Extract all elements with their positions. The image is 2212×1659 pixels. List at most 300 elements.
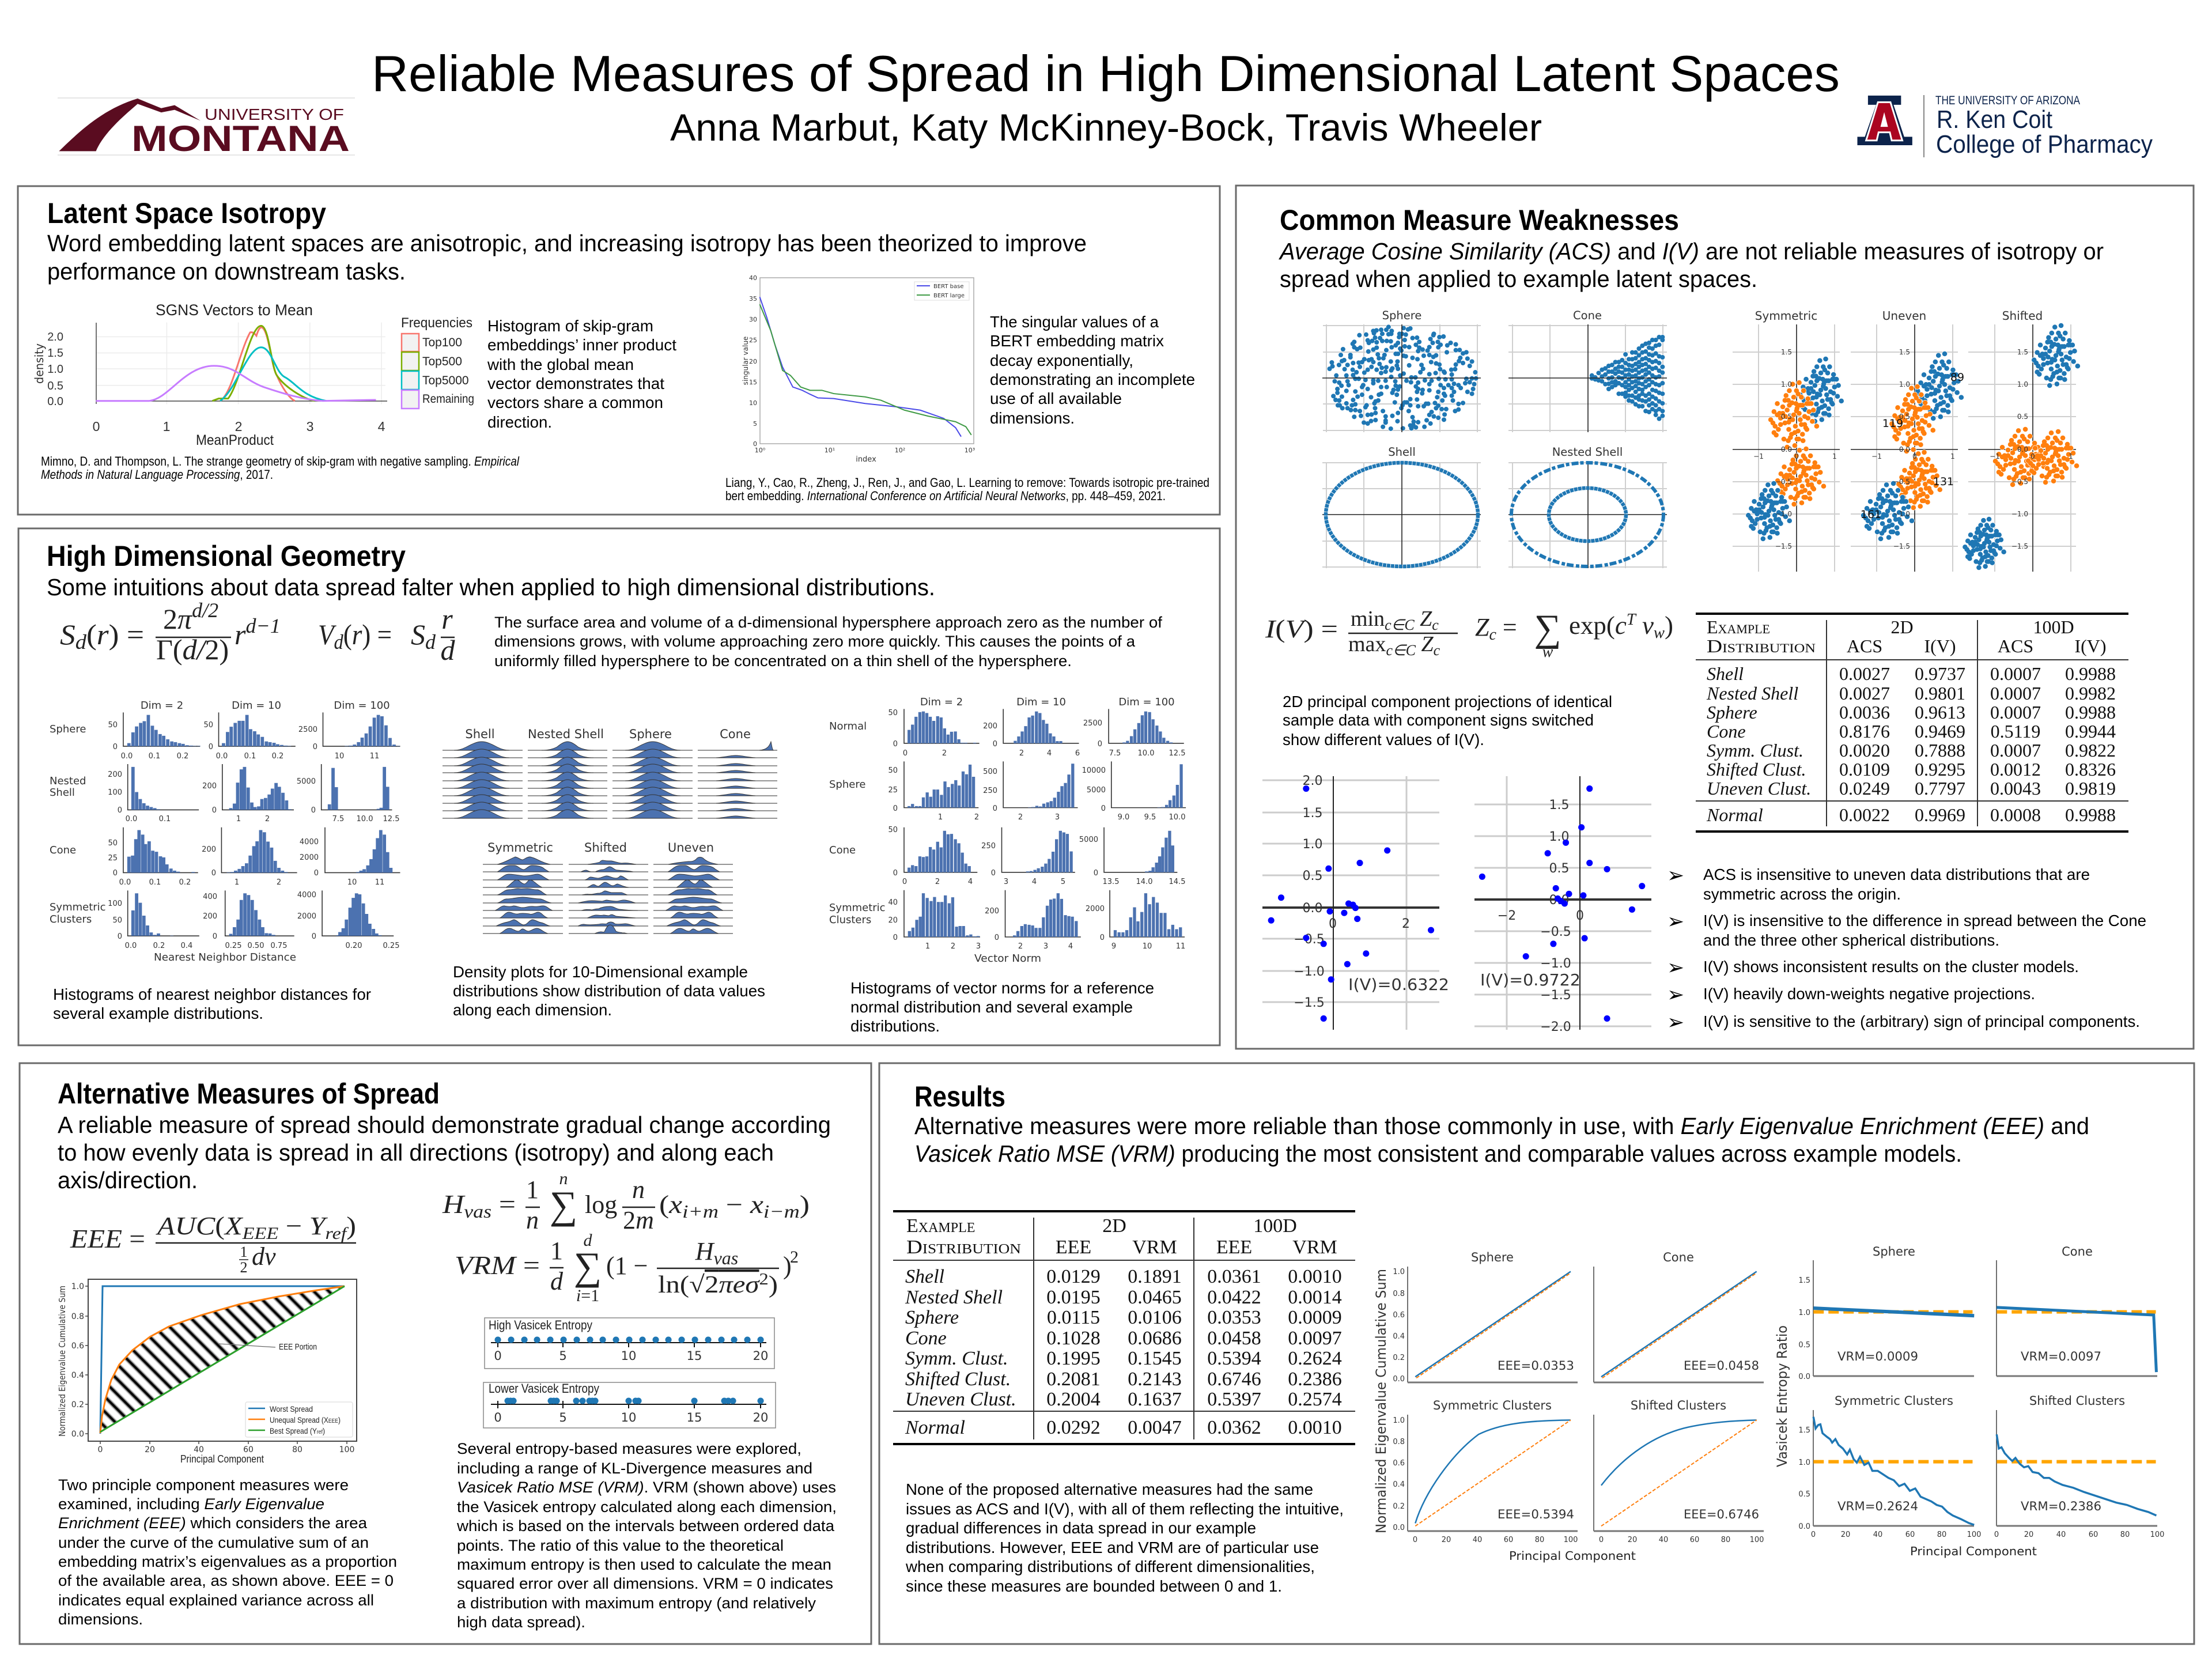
scatter: nested shell	[1508, 445, 1667, 568]
formula: VRM: 2	[790, 1248, 799, 1267]
bullet list: measure weaknesses: ➢	[1667, 1011, 1684, 1034]
table: EEE and VRM: 0.2386	[1288, 1369, 1342, 1390]
caption: nearest neighbor histograms: Histograms of nearest neighbor distances for	[53, 985, 371, 1003]
chart: BERT singular values: singular value	[742, 337, 750, 385]
column and row headings: Dim = 10	[232, 700, 281, 712]
chart: EEE portion illustration: 0.8	[71, 1312, 84, 1321]
plot: symmetric clusters VRM: 40	[1873, 1530, 1882, 1539]
formula: I(V): c	[1489, 626, 1496, 644]
text: results discussion: gradual differences in data spread in our example	[906, 1519, 1256, 1537]
histogram: nested shell dim 2: 0.1	[159, 815, 171, 823]
diagram: high Vasicek entropy: 20	[753, 1349, 768, 1363]
histogram: sphere dim 2: 50	[888, 766, 898, 775]
caption: density plots	[453, 963, 765, 1019]
bullet list: measure weaknesses	[1667, 864, 2146, 1034]
text: surface area and volume explanation: uniformly filled hypersphere to be concentrated on a thin shell of the hypersphere.	[494, 652, 1072, 670]
table: ACS and I(V): 0.0022	[1839, 804, 1890, 825]
logo: University of Arizona College of Pharmacy: R. Ken Coit	[1937, 105, 2052, 134]
histogram: normal dim 100: 10.0	[1138, 749, 1154, 758]
formula: Vasicek entropy: (x	[659, 1191, 680, 1219]
histogram: symmetric clusters dim 10: 400	[203, 893, 217, 901]
plot: cone EEE: EEE=0.0458	[1684, 1359, 1759, 1373]
histogram: cone dim 100: 11	[375, 878, 384, 887]
formula: EEE: dv	[252, 1242, 276, 1271]
chart: BERT singular values: 5	[753, 420, 757, 428]
histogram: symmetric clusters dim 2: 1	[925, 942, 930, 951]
table: EEE and VRM: 0.6746	[1207, 1369, 1261, 1390]
scatter: projection with I(V)=0.9722: 0.0	[1549, 893, 1570, 908]
formula: EEE	[70, 1212, 356, 1276]
histogram: cone dim 2: 50	[888, 826, 898, 834]
plot: symmetric clusters VRM: VRM=0.2624	[1837, 1499, 1918, 1513]
plot: symmetric clusters EEE: 1.0	[1393, 1416, 1405, 1425]
table: ACS and I(V)	[1696, 614, 2128, 832]
table: EEE and VRM: 100D	[1253, 1215, 1297, 1237]
table: ACS and I(V): 0.0249	[1839, 778, 1890, 799]
scatter: uneven clusters: 1	[1950, 452, 1955, 460]
plot: symmetric clusters VRM: 0.5	[1798, 1490, 1810, 1499]
text: VRM description: Vasicek Ratio MSE (VRM) . VRM (shown above) uses	[457, 1479, 836, 1496]
formula: hypersphere surface and volume: (	[86, 618, 97, 651]
text: VRM description: which is based on the intervals between ordered data	[456, 1517, 835, 1535]
histogram: symmetric clusters dim 100: 10	[1143, 942, 1152, 951]
chart: SGNS density curves	[32, 301, 387, 448]
legend: frequencies: Top5000	[422, 374, 469, 387]
plot: symmetric clusters EEE	[1393, 1399, 1578, 1544]
chart: EEE portion illustration: 0.4	[71, 1371, 84, 1380]
formula: hypersphere surface and volume	[60, 599, 455, 666]
histogram: symmetric clusters dim 2: 50	[112, 916, 122, 925]
histogram: symmetric clusters dim 100: 4000	[297, 891, 316, 900]
scatter: projection with I(V)=0.6322: 2.0	[1302, 774, 1323, 788]
table: EEE and VRM: Shifted Clust.	[905, 1369, 1011, 1390]
table: ACS and I(V): 0.9737	[1915, 663, 1965, 684]
density ridge plots: spherical distributions	[443, 727, 777, 818]
scatter: uneven clusters	[1851, 309, 1964, 572]
caption: nearest neighbor histograms: several example distributions.	[53, 1004, 263, 1022]
column and row headings: Clusters	[829, 914, 871, 926]
scatter: symmetric clusters: 1.0	[1781, 380, 1792, 388]
formula: I(V): I(V) =	[1265, 615, 1338, 643]
scatter: uneven clusters: 161	[1861, 508, 1881, 521]
formula: VRM: i=1	[576, 1286, 599, 1305]
text: EEE description: indicates equal explained variance across all	[58, 1592, 374, 1609]
heading: Latent Space Isotropy	[47, 197, 326, 229]
histogram: symmetric clusters dim 2: 0	[893, 934, 898, 942]
text: VRM description	[456, 1440, 837, 1631]
histogram: symmetric clusters dim 2: 0.0	[125, 942, 137, 950]
formula: EEE: −	[278, 1212, 309, 1240]
scatter: symmetric clusters: 0	[1794, 452, 1799, 460]
formula: hypersphere surface and volume: d	[334, 630, 344, 653]
table: EEE and VRM: 0.1891	[1128, 1266, 1182, 1287]
histogram: nested shell dim 100: 7.5	[332, 815, 344, 823]
caption: skip-gram histogram: with the global mean	[487, 356, 634, 373]
legend: frequencies: Remaining	[422, 392, 474, 406]
scatter: symmetric clusters: 1.5	[1781, 348, 1792, 356]
histogram: nested shell dim 100: 0	[311, 806, 316, 815]
chart: EEE portion illustration: 0.6	[71, 1341, 84, 1351]
column and row headings: Dim = 2	[920, 696, 963, 708]
histogram: nested shell dim 2: 0.0	[126, 815, 137, 823]
chart: BERT singular values: 10³	[965, 447, 975, 454]
histogram: sphere dim 10	[203, 712, 296, 761]
scatter: shifted clusters: −1.5	[2011, 542, 2028, 550]
table: ACS and I(V): 0.9969	[1915, 804, 1965, 825]
scatter: projection with I(V)=0.9722	[1474, 776, 1651, 1034]
scatter: symmetric clusters: −1.5	[1775, 542, 1792, 550]
histogram: cone dim 2: 0.2	[179, 878, 191, 887]
scatter: nested shell: Nested Shell	[1552, 445, 1623, 459]
citation: Mimno and Thompson: Methods in Natural Language Processing, 2017.	[41, 467, 273, 482]
histogram: cone dim 10: 1	[235, 878, 239, 887]
logo: University of Arizona College of Pharmacy: THE UNIVERSITY OF ARIZONA	[1935, 94, 2080, 107]
plot: sphere EEE: 1.0	[1393, 1268, 1405, 1276]
table: EEE and VRM: 0.0195	[1046, 1287, 1101, 1308]
text: EEE description: Two principle component measures were	[58, 1476, 349, 1494]
table: ACS and I(V): 0.9801	[1915, 683, 1965, 704]
table: EEE and VRM: Shell	[905, 1266, 944, 1287]
histogram: cone dim 2: 0	[893, 869, 898, 878]
text: EEE description: dimensions.	[58, 1611, 143, 1628]
column and row headings: Dim = 10	[1016, 696, 1066, 708]
table: EEE and VRM: VRM	[1292, 1237, 1337, 1258]
text: EEE description: examined, including Early Eigenvalue	[58, 1495, 324, 1513]
histogram: cone dim 10: 3	[1004, 878, 1008, 886]
histogram: sphere dim 2: 0.1	[149, 752, 160, 761]
scatter: shifted clusters: 0.0	[2017, 445, 2028, 454]
column and row headings	[829, 696, 1175, 965]
formula: I(V): =	[1496, 613, 1517, 641]
column and row headings: Nearest Neighbor Distance	[154, 951, 296, 963]
diagram: high Vasicek entropy: 5	[559, 1349, 567, 1363]
table: EEE and VRM: 0.0115	[1047, 1307, 1100, 1328]
text: EEE description: embedding matrix’s eigenvalues as a proportion	[58, 1553, 397, 1570]
density ridge plots: spherical distributions: Nested Shell	[528, 727, 604, 741]
table: ACS and I(V): 0.0007	[1990, 683, 2041, 704]
density ridge plots: spherical distributions: Cone	[720, 727, 751, 741]
chart group: Vasicek entropy ratios: Principal Component	[1910, 1544, 2037, 1558]
histogram: cone dim 10	[202, 827, 297, 887]
scatter: projection with I(V)=0.6322: 0.0	[1302, 901, 1323, 916]
plot: symmetric clusters EEE: 0.2	[1393, 1502, 1405, 1511]
plot: shifted clusters EEE	[1594, 1399, 1764, 1544]
diagram: high Vasicek entropy: 0	[494, 1349, 502, 1363]
bullet list: measure weaknesses: I(V) is sensitive to the (arbitrary) sign of principal components.	[1703, 1012, 2140, 1030]
histogram: cone dim 2: 0	[902, 878, 907, 886]
histogram: normal dim 2: 0	[893, 740, 898, 749]
column and row headings: Sphere	[50, 723, 86, 735]
diagram: lower Vasicek entropy: 0	[494, 1411, 502, 1424]
table: ACS and I(V): 0.9469	[1915, 721, 1965, 742]
scatter: uneven clusters: 89	[1950, 371, 1964, 384]
plot: shifted clusters EEE: 0	[1599, 1536, 1604, 1544]
scatter: projection with I(V)=0.9722: −0.5	[1540, 925, 1571, 939]
plot: cone VRM	[1997, 1245, 2157, 1376]
histogram: sphere dim 2: 0	[893, 804, 898, 813]
table: EEE and VRM: Normal	[905, 1417, 965, 1438]
chart: BERT singular values: 10²	[895, 447, 905, 454]
intro text: performance on downstream tasks.	[47, 258, 406, 285]
formula: Vasicek entropy: 1	[526, 1176, 539, 1204]
table: ACS and I(V): 0.0020	[1839, 740, 1890, 761]
histogram: nested shell dim 2: 100	[108, 788, 122, 797]
histogram: nested shell dim 100: 12.5	[383, 815, 399, 823]
formula: Vasicek entropy: ∑	[550, 1183, 577, 1227]
chart: SGNS density curves: SGNS Vectors to Mean	[156, 301, 313, 319]
scatter: uneven clusters: −1	[1871, 452, 1882, 460]
histogram: sphere dim 100: 2500	[298, 725, 317, 734]
text: results discussion: since these measures are bounded between 0 and 1.	[906, 1577, 1282, 1595]
histogram: symmetric clusters dim 10	[985, 890, 1081, 951]
intro text: Some intuitions about data spread falter when applied to high dimensional distributions.	[47, 574, 935, 600]
plot: symmetric clusters VRM: 1.0	[1798, 1458, 1810, 1467]
plot: sphere VRM: 1.5	[1798, 1276, 1810, 1285]
panel: latent space isotropy	[18, 186, 1220, 515]
formula: VRM: VRM =	[455, 1250, 540, 1280]
histogram: symmetric clusters dim 2: 20	[888, 916, 898, 925]
table: ACS and I(V): 0.0007	[1990, 740, 2041, 761]
table: ACS and I(V): 0.0027	[1839, 663, 1890, 684]
scatter: shifted clusters: 1.5	[2017, 348, 2028, 356]
histogram: sphere dim 10	[983, 761, 1077, 822]
formula: I(V): w	[1542, 643, 1553, 661]
histogram: sphere dim 100: 0	[313, 743, 317, 751]
formula: I(V): v	[1636, 611, 1654, 640]
legend: frequencies: Frequencies	[401, 315, 472, 331]
chart: SGNS density curves: 2.0	[47, 331, 63, 343]
logo: University of Arizona College of Pharmacy: College of Pharmacy	[1936, 130, 2153, 158]
caption: skip-gram histogram: embeddings’ inner product	[487, 336, 676, 354]
table: ACS and I(V): 0.0027	[1839, 683, 1890, 704]
formula: Vasicek entropy: x	[750, 1191, 762, 1219]
formula: Vasicek entropy: H	[443, 1189, 462, 1219]
histogram: nested shell dim 2: 200	[108, 770, 122, 779]
table: EEE and VRM: 0.0458	[1207, 1328, 1261, 1349]
plot: cone VRM: VRM=0.0097	[2021, 1350, 2101, 1363]
caption: skip-gram histogram: vector demonstrates that	[487, 375, 664, 392]
intro text: A reliable measure of spread should demonstrate gradual change according	[58, 1112, 831, 1138]
caption: BERT singular values: dimensions.	[990, 409, 1075, 427]
histogram: cone dim 2: 0	[113, 869, 118, 878]
table: EEE and VRM: 0.0014	[1288, 1287, 1342, 1308]
table: ACS and I(V): 0.9982	[2065, 683, 2116, 704]
intro text: Word embedding latent spaces are anisotropic, and increasing isotropy has been theorized to improve	[47, 230, 1087, 256]
histogram: normal dim 10	[983, 709, 1080, 758]
logo: University of Arizona College of Pharmacy	[1858, 94, 2153, 158]
bullet list: measure weaknesses: symmetric across the origin.	[1703, 885, 1901, 903]
histogram: nested shell dim 10: 200	[202, 782, 217, 791]
caption: vector norm histograms: normal distribution and several example	[850, 998, 1133, 1016]
table: ACS and I(V): 0.9819	[2065, 778, 2116, 799]
formula: I(V)	[1265, 607, 1673, 661]
plot: sphere EEE: EEE=0.0353	[1498, 1359, 1574, 1373]
caption: skip-gram histogram: direction.	[487, 413, 552, 431]
table: EEE and VRM: Cone	[905, 1328, 947, 1349]
formula: VRM: ln(√ 2πeσ	[658, 1272, 754, 1298]
table: EEE and VRM: 0.5394	[1207, 1348, 1261, 1369]
histogram: symmetric clusters dim 2: 100	[108, 900, 122, 908]
table: EEE and VRM: 0.2624	[1288, 1348, 1342, 1369]
title: Reliable Measures of Spread in High Dimensional Latent Spaces	[372, 45, 1840, 102]
formula: VRM: 1	[550, 1237, 563, 1265]
plot: symmetric clusters VRM: 0.0	[1798, 1522, 1810, 1531]
formula: Vasicek entropy: vas	[464, 1201, 491, 1222]
chart: EEE portion illustration: 80	[292, 1445, 303, 1454]
scatter: projection with I(V)=0.9722: −2.0	[1540, 1020, 1571, 1034]
chart: EEE portion illustration: 0.0	[71, 1430, 84, 1439]
table: ACS and I(V): 0.9988	[2065, 804, 2116, 825]
plot: symmetric clusters EEE: 0.8	[1393, 1438, 1405, 1446]
histogram: normal dim 100: 7.5	[1109, 749, 1121, 758]
histogram: normal dim 10: 200	[983, 722, 997, 731]
diagram: lower Vasicek entropy	[483, 1381, 776, 1428]
formula: I(V): Z	[1416, 632, 1434, 656]
histogram: symmetric clusters dim 100: 0.25	[383, 942, 399, 950]
formula: I(V): c	[1432, 617, 1439, 633]
scatter: shifted clusters: −1.0	[2011, 510, 2028, 518]
table: EEE and VRM: Distribution	[906, 1237, 1021, 1258]
legend: frequencies: Top500	[422, 355, 462, 368]
table: ACS and I(V): ACS	[1847, 636, 1882, 656]
column and row headings: Symmetric	[829, 902, 886, 914]
histogram: nested shell dim 100	[297, 764, 399, 823]
histogram: normal dim 100: 0	[1098, 740, 1102, 749]
formula: I(V): w	[1654, 624, 1665, 642]
table: EEE and VRM: 0.0361	[1207, 1266, 1261, 1287]
scatter: projection with I(V)=0.9722: 0	[1576, 909, 1584, 923]
formula: I(V): Z	[1415, 607, 1432, 631]
scatter: uneven clusters: Uneven	[1882, 309, 1926, 323]
formula: Vasicek entropy: n	[632, 1176, 645, 1204]
table: EEE and VRM: 0.1545	[1128, 1348, 1182, 1369]
caption: principal component projections: show different values of I(V).	[1283, 731, 1484, 749]
plot: shifted clusters VRM: 0	[1994, 1530, 1999, 1539]
caption: vector norm histograms: Histograms of vector norms for a reference	[850, 979, 1154, 997]
formula: Vasicek entropy	[442, 1169, 810, 1234]
formula: VRM: d	[550, 1267, 564, 1295]
histogram: symmetric clusters dim 100: 0	[312, 932, 316, 941]
table: EEE and VRM: Symm. Clust.	[905, 1348, 1008, 1369]
table: EEE and VRM: 0.1637	[1128, 1389, 1182, 1410]
histogram: normal dim 2: 50	[888, 709, 898, 717]
formula: EEE: Y	[309, 1212, 323, 1240]
chart: EEE portion illustration: Unequal Spread (XEEE)	[270, 1415, 341, 1424]
text: results discussion: issues as ACS and I(V), with all of them reflecting the intuitive,	[906, 1500, 1344, 1518]
plot: symmetric clusters VRM	[1798, 1394, 1981, 1539]
histogram: sphere dim 2: 50	[108, 721, 118, 730]
logo: University of Montana: UNIVERSITY OF	[205, 105, 344, 123]
chart: SGNS density curves: density	[32, 343, 46, 384]
histogram: nested shell dim 100: 10.0	[357, 815, 373, 823]
column and row headings: Dim = 2	[141, 700, 183, 712]
histogram: symmetric clusters dim 2	[888, 890, 981, 951]
scatter: projection with I(V)=0.9722: 1.5	[1549, 798, 1570, 813]
formula: hypersphere surface and volume: Γ(d/2)	[156, 633, 229, 666]
text: results discussion: None of the proposed alternative measures had the same	[906, 1480, 1313, 1498]
formula: VRM: (1 −	[606, 1252, 648, 1280]
histogram: cone dim 10: 4	[1032, 878, 1037, 886]
formula: EEE: EEE	[242, 1224, 278, 1243]
scatter: sphere	[1322, 309, 1481, 432]
column and row headings: Dim = 100	[1118, 696, 1175, 708]
scatter: projection with I(V)=0.9722: −2	[1498, 909, 1516, 923]
text: surface area and volume explanation	[494, 614, 1162, 670]
formula: hypersphere surface and volume: r	[235, 618, 245, 651]
bullet list: measure weaknesses: I(V) is insensitive to the difference in spread between the Cone	[1703, 912, 2146, 929]
chart: BERT singular values: BERT base	[933, 284, 964, 290]
table: EEE and VRM: 2D	[1102, 1215, 1126, 1237]
formula: VRM: )	[783, 1252, 792, 1280]
table: ACS and I(V): 0.7797	[1915, 778, 1965, 799]
formula: Vasicek entropy: i+m	[682, 1201, 719, 1222]
chart: EEE portion illustration: Principal Component	[180, 1453, 264, 1465]
plot: symmetric clusters EEE: 0.4	[1393, 1480, 1405, 1489]
intro text: spread when applied to example latent spaces.	[1280, 266, 1757, 292]
plot: sphere VRM: 0.0	[1798, 1373, 1810, 1381]
histogram: cone dim 2: 25	[108, 854, 118, 863]
histogram: cone dim 100	[300, 827, 400, 887]
plot: symmetric clusters VRM: 20	[1841, 1530, 1850, 1539]
diagram: high Vasicek entropy	[485, 1318, 774, 1369]
histogram: cone dim 2	[108, 827, 198, 887]
histogram: symmetric clusters dim 10: 0.75	[271, 942, 287, 950]
chart: SGNS density curves: MeanProduct	[196, 432, 274, 448]
table: ACS and I(V): 0.5119	[1991, 721, 2040, 742]
scatter: shell: Shell	[1388, 445, 1416, 459]
table: EEE and VRM: 0.0010	[1288, 1266, 1342, 1287]
chart group: Vasicek entropy ratios	[1774, 1245, 2164, 1558]
table: EEE and VRM: 0.0422	[1207, 1287, 1261, 1308]
histogram: sphere dim 100: 5000	[1087, 786, 1106, 795]
table: ACS and I(V): 0.0043	[1990, 778, 2041, 799]
text: surface area and volume explanation: The surface area and volume of a d-dimensional hypersphere approach zero as the number of	[494, 614, 1162, 631]
table: ACS and I(V): Sphere	[1707, 702, 1757, 723]
plot: symmetric clusters EEE: Symmetric Clusters	[1433, 1399, 1552, 1412]
histogram: sphere dim 100: 9.5	[1144, 813, 1156, 822]
chart: SGNS density curves: 0.5	[47, 380, 63, 392]
caption: skip-gram histogram	[487, 317, 676, 431]
bullet list: measure weaknesses: and the three other spherical distributions.	[1703, 931, 1999, 949]
table: EEE and VRM: VRM	[1132, 1237, 1177, 1258]
scatter: shifted clusters: 0.5	[2017, 413, 2028, 421]
intro text: Alternative measures were more reliable than those commonly in use, with Early Eigenvalue Enrichment (EEE) and	[914, 1113, 2089, 1139]
caption: nearest neighbor histograms	[53, 985, 371, 1022]
bullet list: measure weaknesses: ➢	[1667, 910, 1684, 934]
citation: Mimno and Thompson	[41, 454, 520, 482]
column and row headings	[50, 700, 390, 963]
table: EEE and VRM	[893, 1211, 1355, 1444]
chart: SGNS density curves: 0	[93, 419, 100, 434]
scatter: shell	[1322, 445, 1481, 568]
legend: frequencies	[401, 315, 474, 409]
formula: hypersphere surface and volume: d	[425, 630, 436, 653]
plot: symmetric clusters EEE: 0.0	[1393, 1524, 1405, 1532]
histogram: normal dim 100: 12.5	[1169, 749, 1185, 758]
formula: VRM: d	[583, 1231, 592, 1250]
histogram: normal dim 10: 2	[1019, 749, 1024, 758]
chart: EEE portion illustration: 40	[194, 1445, 204, 1454]
density ridge plots: cluster distributions: Shifted	[584, 841, 627, 855]
bullet list: measure weaknesses: ➢	[1667, 956, 1684, 980]
text: EEE description: under the curve of the cumulative sum of an	[58, 1534, 369, 1551]
histogram: cone dim 10: 250	[981, 842, 996, 851]
plot: shifted clusters VRM: 60	[2089, 1530, 2098, 1539]
text: VRM description: including a range of KL-Divergence measures and	[457, 1460, 812, 1477]
histogram: cone dim 100: 14.0	[1136, 878, 1152, 886]
table: EEE and VRM: Nested Shell	[905, 1287, 1003, 1308]
histogram: symmetric clusters dim 10: 4	[1068, 942, 1073, 951]
